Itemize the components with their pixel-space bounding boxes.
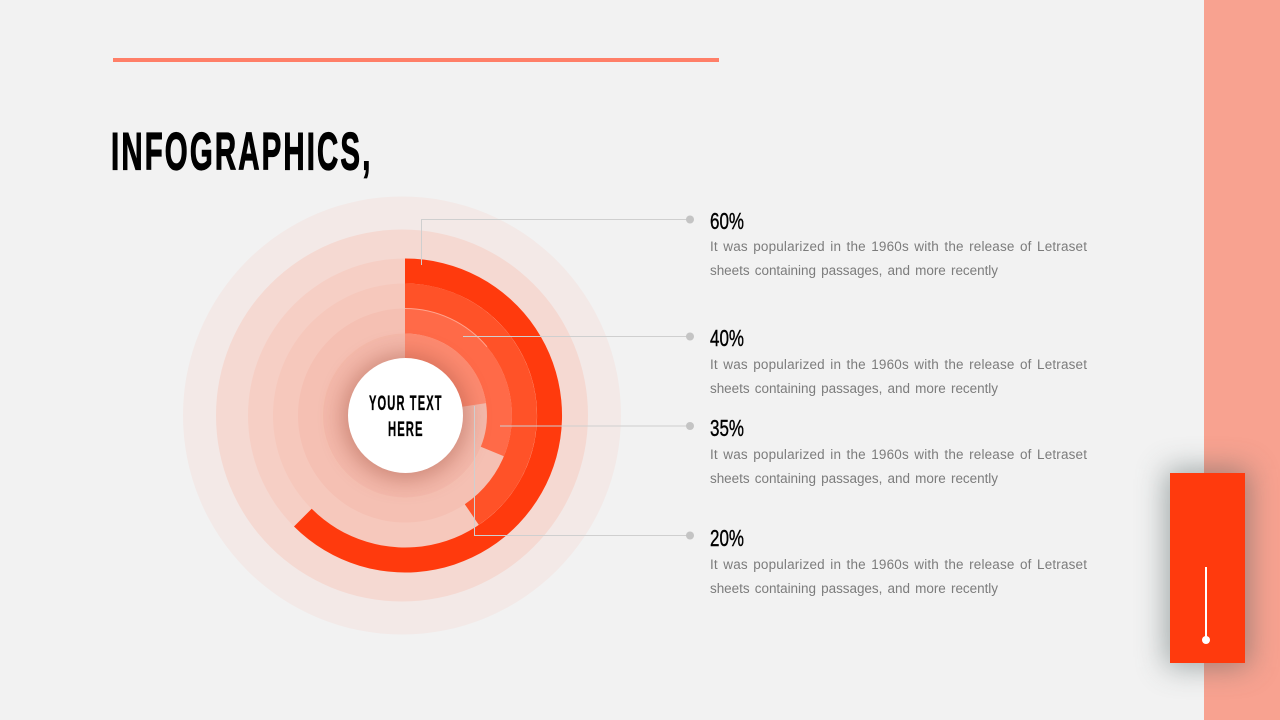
red card shadow — [1166, 469, 1249, 667]
center label: HERE — [388, 417, 424, 441]
card indicator dot — [1202, 636, 1210, 644]
arc: 60% — [294, 258, 562, 572]
text block: 20% — [710, 525, 1087, 596]
text block: 35%: sheets containing passages, and more recently — [710, 471, 998, 486]
leader line: 60% — [422, 216, 694, 265]
text block: 60%: It was popularized in the 1960s with the release of Letraset — [710, 239, 1087, 254]
leader line: 40% — [463, 332, 694, 340]
arc: 20% — [405, 334, 486, 407]
text block: 40%: It was popularized in the 1960s with the release of Letraset — [710, 357, 1087, 372]
center hub — [348, 358, 463, 473]
text block: 35%: It was popularized in the 1960s with the release of Letraset — [710, 447, 1087, 462]
text block: 40%: sheets containing passages, and more recently — [710, 381, 998, 396]
leader line: 20% — [474, 406, 694, 540]
right side band — [1204, 0, 1280, 720]
arc: 40% — [405, 284, 537, 525]
thin highlight on inner arc — [405, 308, 487, 347]
card indicator line — [1205, 567, 1207, 640]
text block: 60% — [710, 208, 1087, 278]
center hub shadow — [343, 355, 467, 479]
text block: 40%: 40% — [710, 325, 744, 351]
center label: YOUR TEXT — [369, 391, 443, 415]
text block: 20%: It was popularized in the 1960s with the release of Letraset — [710, 557, 1087, 572]
arc: 35% — [405, 308, 512, 456]
red card — [1170, 473, 1245, 663]
top accent line — [113, 58, 719, 62]
text block: 60%: 60% — [710, 208, 744, 234]
center label — [369, 391, 443, 441]
text block: 35% — [710, 415, 1087, 486]
text block: 20%: sheets containing passages, and more recently — [710, 581, 998, 596]
background rings — [183, 196, 621, 634]
radial chart — [183, 196, 621, 634]
text block: 35%: 35% — [710, 415, 744, 441]
text block: 60%: sheets containing passages, and more recently — [710, 263, 998, 278]
text block: 40% — [710, 325, 1087, 396]
title: INFOGRAPHICS, — [111, 123, 373, 182]
leader line: 35% — [500, 422, 694, 430]
text block: 20%: 20% — [710, 525, 744, 551]
